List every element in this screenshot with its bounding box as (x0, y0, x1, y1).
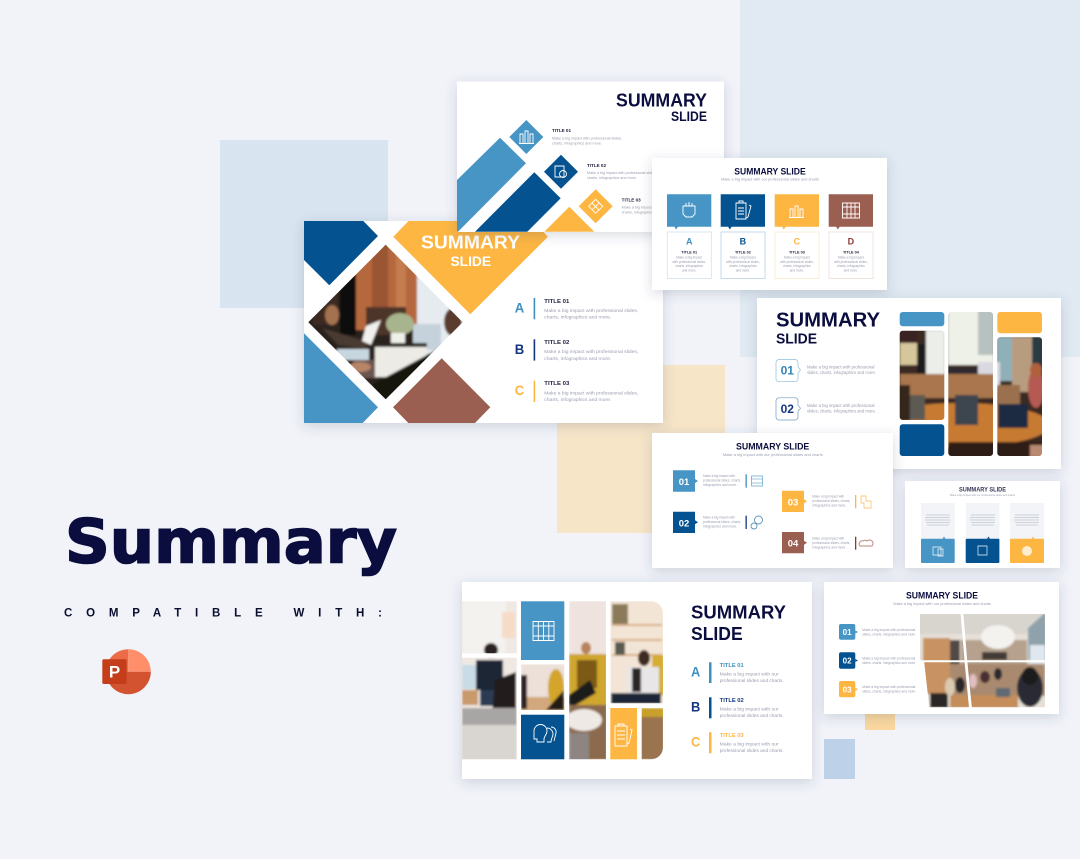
list item B: TITLE 02 (544, 340, 569, 346)
step 03 (782, 491, 871, 512)
heading: SUMMARY (776, 310, 881, 332)
card D: Make a big impact (838, 256, 864, 260)
decorative square: left pale blue (220, 140, 388, 308)
card B: and more. (736, 268, 750, 272)
card B: Make a big impact (730, 256, 756, 260)
heading: SUMMARY SLIDE (734, 166, 806, 176)
column 3 (1010, 503, 1044, 563)
icon: PowerPoint logo: P (109, 662, 120, 682)
list item 02: Make a big impact with professional slides, (587, 171, 657, 175)
heading: summary slide: SUMMARY (616, 90, 708, 111)
step 01: professional slides, charts, (703, 478, 741, 482)
panel: four column cards slide (652, 158, 887, 290)
badge row 02: 02 (843, 657, 852, 666)
card B: B (740, 236, 747, 246)
shape: yellow title banner (393, 221, 548, 314)
shape: brown diamond (393, 358, 490, 423)
photo: conference table with laptops (900, 312, 1042, 456)
panel: diamond summary slide (300, 221, 663, 423)
subheading: Make a big impact with our professional slides and charts (893, 602, 991, 606)
list item C (691, 732, 784, 754)
step 02 (673, 512, 762, 533)
card A: Make a big impact (676, 256, 702, 260)
list item A: charts, infographics and more. (544, 315, 611, 320)
list item B: TITLE 02 (720, 698, 744, 704)
panel: meeting photo slide (757, 298, 1061, 469)
card D (829, 194, 873, 278)
block: dark blue (900, 424, 944, 456)
step 03: infographics and more. (812, 504, 846, 508)
list item C: TITLE 03 (544, 381, 569, 387)
list item 02: TITLE 02 (587, 163, 607, 168)
panel: diagonal bands slide: SLIDE (671, 108, 707, 124)
badge row 01: 01 (843, 628, 852, 637)
list item 03: TITLE 03 (622, 198, 641, 202)
list item 01: Make a big impact with professional slides, (552, 136, 622, 140)
step 01: infographics and more. (703, 483, 737, 487)
step 04: 04 (788, 539, 799, 550)
decorative square: pale orange (557, 365, 725, 533)
tile: yellow icon (610, 708, 637, 759)
list item A: TITLE 01 (544, 299, 569, 305)
list item 03: charts, infographics and more. (622, 210, 672, 214)
photo: team discussion collage (460, 600, 664, 762)
panel: boardroom photo slide (824, 582, 1059, 714)
badge row 01 (839, 624, 916, 640)
badge row 03: slides, charts, infographics and more (862, 690, 915, 694)
card A: TITLE 01 (681, 250, 697, 254)
shape: dark blue corner (304, 221, 378, 285)
card A: and more. (682, 268, 696, 272)
panel: diamond summary slide: SLIDE (450, 253, 491, 269)
heading: SUMMARY SLIDE (906, 590, 978, 600)
panel: team photo collage slide: SLIDE (691, 624, 743, 644)
panel: numbered steps slide (652, 433, 893, 568)
card C: and more. (790, 268, 804, 272)
badge row 01: Make a big impact with professional (862, 628, 916, 632)
list item A: Make a big impact with our (720, 672, 779, 678)
card C: C (794, 236, 801, 246)
card C: with professional slides, (780, 260, 814, 264)
card D: TITLE 04 (843, 250, 860, 254)
decorative square: small blue (824, 739, 855, 779)
photo: team at laptops in diamond (308, 244, 462, 400)
list item A: A (691, 664, 701, 679)
list item B: Make a big impact with professional slides, (544, 349, 638, 354)
heading: SUMMARY (691, 602, 786, 622)
card C: Make a big impact (784, 256, 810, 260)
card D: with professional slides, (834, 260, 868, 264)
step 01 (673, 470, 762, 492)
icon: coins diamond (544, 155, 578, 189)
list item 03: Make a big impact with professional slides, (622, 206, 692, 210)
badge row 03 (839, 681, 916, 697)
card D: and more. (844, 268, 858, 272)
block: blue (900, 312, 944, 326)
list item A (691, 662, 784, 684)
list item B (515, 339, 638, 361)
callout 01: Make a big impact with professional (807, 364, 875, 370)
icon: puzzle diamond (579, 189, 613, 223)
subheading: Make a big impact with our professional slides and charts (721, 178, 819, 182)
list item 03 (622, 198, 692, 214)
list item 02: charts, infographics and more. (587, 176, 637, 180)
subheading: Make a big impact with our professional slides and charts (723, 453, 823, 457)
decorative square: small orange (865, 700, 895, 730)
list item 02 (587, 163, 657, 180)
heading: SUMMARY SLIDE (959, 488, 1006, 494)
list item A: TITLE 01 (720, 663, 744, 669)
list item C (515, 381, 638, 402)
callout 01: slides, charts, infographics and more. (807, 370, 876, 375)
list item C: professional slides and charts. (720, 748, 784, 754)
heading: SUMMARY SLIDE (736, 441, 809, 451)
badge row 02: Make a big impact with professional (862, 656, 916, 660)
list item 01 (552, 128, 622, 146)
step 03: professional slides, charts, (812, 499, 850, 503)
card C: TITLE 03 (789, 250, 805, 254)
callout 01 (776, 360, 876, 382)
subheading: Make a big impact with our professional slides and charts (950, 494, 1016, 497)
list item B: charts, infographics and more. (544, 356, 611, 361)
list item B: B (515, 341, 524, 357)
list item 01: charts, infographics and more. (552, 142, 602, 146)
list item B: B (691, 699, 701, 714)
callout 02: 02 (781, 402, 794, 416)
callout 01: 01 (781, 364, 794, 378)
block: yellow (997, 312, 1042, 333)
step 02: 02 (679, 518, 689, 529)
step 04: Make a big impact with (812, 536, 844, 540)
card A: A (686, 236, 693, 246)
card B: with professional slides, (726, 260, 760, 264)
callout 02: slides, charts, infographics and more. (807, 408, 876, 414)
callout 02: Make a big impact with professional (807, 403, 875, 408)
panel: diagonal bands slide (457, 82, 724, 232)
panel: team photo collage slide (460, 582, 812, 779)
list item 01: TITLE 01 (552, 128, 572, 133)
step 01: 01 (679, 477, 690, 488)
card C: charts, infographics (783, 264, 811, 268)
icon: PowerPoint logo (102, 649, 151, 694)
column 2 (966, 503, 999, 563)
list item A (515, 298, 638, 320)
callout 02 (776, 398, 876, 420)
photo: boardroom meeting (918, 612, 1048, 709)
step 02: professional slides, charts, (703, 520, 741, 524)
card A: with professional slides, (672, 260, 706, 264)
card A (667, 194, 711, 278)
tile: dark blue icon (521, 715, 564, 759)
step 02: infographics and more. (703, 524, 737, 528)
step 02: Make a big impact with (703, 515, 735, 519)
list item C: C (691, 734, 701, 749)
list item C: C (515, 382, 524, 398)
step 03: 03 (788, 497, 798, 508)
step 04 (782, 532, 873, 553)
badge row 03: 03 (843, 685, 852, 694)
card C (775, 194, 819, 278)
card B: TITLE 02 (735, 250, 751, 254)
list item C: charts, infographics and more. (544, 397, 611, 402)
list item B: professional slides and charts. (720, 713, 784, 719)
step 03: Make a big impact with (812, 495, 844, 499)
card B (721, 194, 765, 278)
card D: D (848, 236, 855, 246)
step 01: Make a big impact with (703, 474, 735, 478)
list item B (691, 697, 784, 719)
list item C: Make a big impact with professional slides, (544, 390, 638, 395)
list item A: A (515, 300, 524, 316)
main title: Summary (65, 506, 397, 578)
badge row 03: Make a big impact with professional (862, 685, 916, 689)
panel: three column small slide (905, 481, 1060, 568)
list item A: Make a big impact with professional slides, (544, 308, 638, 313)
column 1 (921, 503, 955, 563)
band: light blue (457, 138, 526, 232)
shape: light blue corner (304, 333, 378, 423)
band: yellow (544, 207, 594, 232)
heading: summary slide: SUMMARY (421, 232, 520, 252)
badge row 02 (839, 652, 916, 669)
badge row 01: slides, charts, infographics and more (862, 632, 915, 636)
list item C: TITLE 03 (720, 733, 744, 739)
decorative square: top right pale blue (740, 0, 1080, 357)
icon: chart diamond (509, 120, 543, 154)
list item A: professional slides and charts. (720, 678, 784, 684)
list item B: Make a big impact with our (720, 706, 779, 712)
list item C: Make a big impact with our (720, 742, 779, 748)
panel: meeting photo slide: SLIDE (776, 332, 817, 348)
step 04: infographics and more. (812, 545, 846, 549)
band: dark blue (475, 172, 561, 232)
card D: charts, infographics (837, 264, 865, 268)
card A: charts, infographics (675, 264, 703, 268)
badge row 02: slides, charts, infographics and more (862, 661, 915, 665)
card B: charts, infographics (729, 264, 757, 268)
compatibility subtitle: COMPATIBLE WITH: (64, 608, 382, 620)
step 04: professional slides, charts, (812, 541, 850, 545)
tile: blue icon (521, 601, 564, 660)
